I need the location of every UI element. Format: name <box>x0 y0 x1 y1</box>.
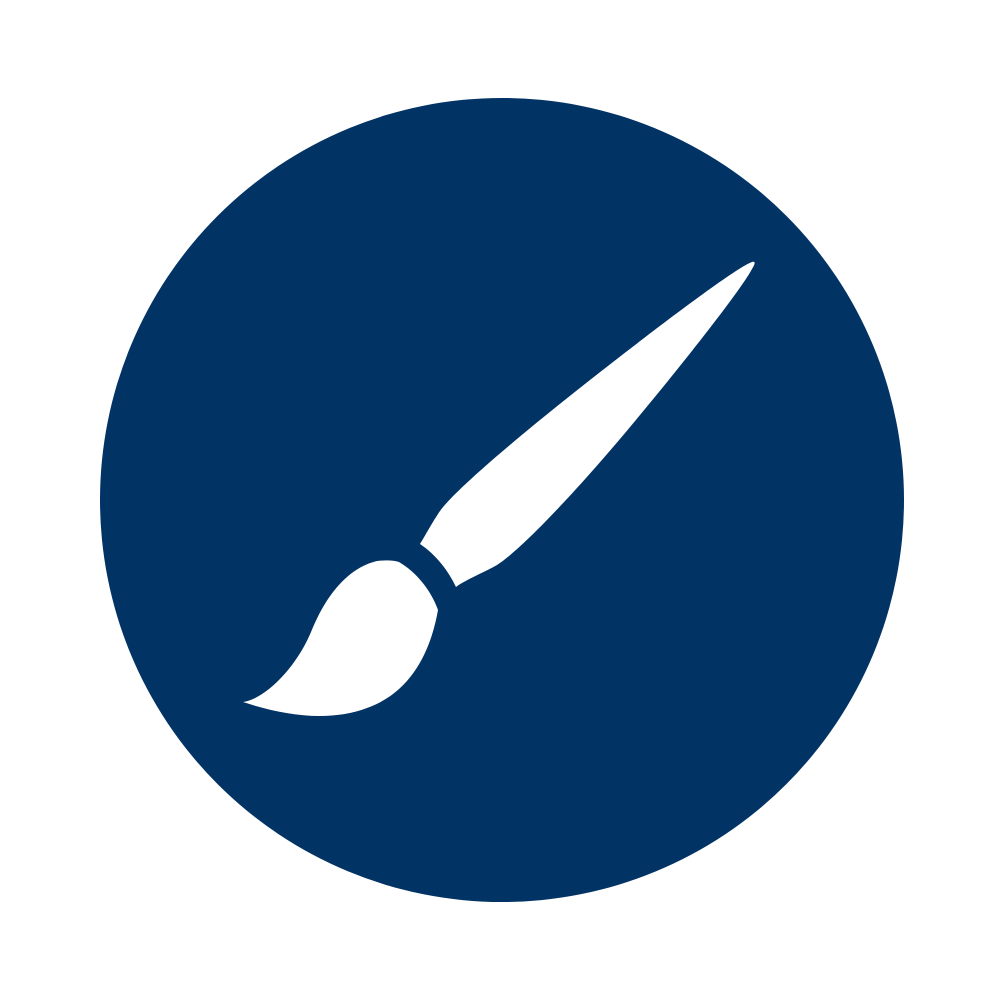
brush handle <box>420 262 755 587</box>
brush bristles <box>243 560 438 716</box>
navy circle background <box>100 98 904 902</box>
paintbrush <box>243 262 755 716</box>
